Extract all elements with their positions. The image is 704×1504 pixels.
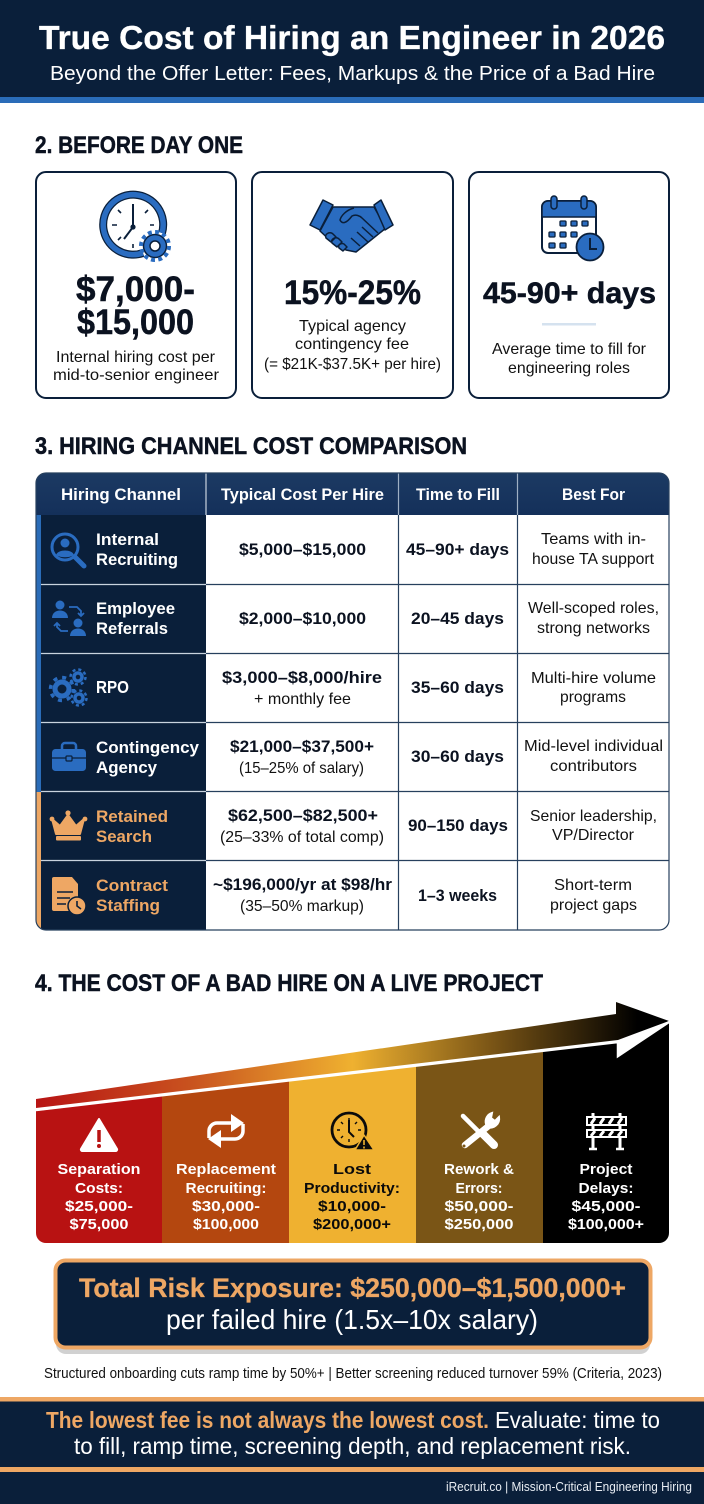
- stat: time to fill: 45-90+ days: [483, 277, 656, 310]
- icon: warning triangle: [81, 1119, 117, 1151]
- icon: referral people: [52, 600, 86, 636]
- icon: gears: [50, 670, 86, 706]
- description: Internal hiring cost per: [56, 349, 216, 366]
- icon: crown: [50, 810, 87, 840]
- row: RPO: RPO: [96, 677, 129, 697]
- description: Average time to fill for: [492, 341, 647, 358]
- icon: road barrier: [587, 1113, 626, 1149]
- step: rework and errors: $250,000: [444, 1216, 514, 1233]
- description: contingency fee: [295, 336, 409, 353]
- row: contract staffing: 1–3 weeks: [418, 887, 497, 905]
- row: employee referrals: Referrals: [96, 620, 168, 638]
- step: project delays: Project: [580, 1161, 632, 1178]
- row: internal recruiting: [52, 531, 655, 569]
- step: lost productivity: Productivity:: [304, 1180, 400, 1197]
- row: employee referrals: 20–45 days: [411, 610, 504, 628]
- step: project delays: $45,000-: [572, 1198, 641, 1215]
- panel: time to fill card: [469, 172, 669, 398]
- row: contract staffing: (35–50% markup): [240, 898, 364, 915]
- row: contingency agency: contributors: [550, 758, 637, 775]
- table header: [61, 486, 626, 504]
- row: contingency agency: (15–25% of salary): [239, 760, 364, 777]
- takeaway: The lowest fee is not always the lowest cost.: [46, 1407, 489, 1433]
- row: internal recruiting: Recruiting: [96, 551, 178, 569]
- step: replacement recruiting: $100,000: [193, 1216, 259, 1233]
- row: internal recruiting: $5,000–$15,000: [239, 541, 366, 559]
- subtitle: Beyond the Offer Letter: Fees, Markups & the Price of a Bad Hire: [50, 63, 655, 85]
- table header: Typical Cost Per Hire: [221, 486, 384, 504]
- row: employee referrals: Employee: [96, 600, 175, 618]
- step: replacement recruiting: [176, 1114, 276, 1233]
- panel: agency fee card: [252, 172, 453, 398]
- step: rework and errors: Rework &: [444, 1161, 514, 1178]
- callout: total risk exposure: per failed hire (1.5x–10x salary): [166, 1304, 538, 1335]
- stat: agency fee: 15%-25%: [284, 274, 421, 312]
- panel: internal hiring cost card: [36, 172, 236, 398]
- row: contingency agency: Mid-level individual: [524, 738, 663, 755]
- icon: clock with warning: [332, 1113, 374, 1150]
- callout: total risk exposure: [56, 1260, 650, 1354]
- row: retained search: [50, 807, 657, 846]
- row: contract staffing: Short-term: [554, 877, 632, 894]
- row: internal recruiting: Internal: [96, 531, 159, 549]
- row: retained search: (25–33% of total comp): [220, 829, 384, 846]
- description: [492, 341, 647, 377]
- row: contingency agency: 30–60 days: [411, 748, 504, 766]
- row: contingency agency: [52, 738, 663, 777]
- takeaway: [46, 1407, 660, 1459]
- row: RPO: Multi-hire volume: [531, 670, 656, 687]
- header banner: [0, 0, 704, 103]
- stat: internal cost: $15,000: [77, 303, 194, 342]
- step: separation costs: $75,000: [70, 1216, 128, 1233]
- row: employee referrals: $2,000–$10,000: [239, 610, 366, 628]
- table header: Best For: [562, 486, 626, 504]
- row: retained search: $62,500–$82,500+: [228, 807, 378, 825]
- table header: Hiring Channel: [61, 486, 181, 504]
- row: retained search: VP/Director: [552, 827, 635, 844]
- stat: internal cost: [76, 270, 195, 342]
- step: rework and errors: Errors:: [456, 1180, 502, 1197]
- source note: Structured onboarding cuts ramp time by 50%+ | Better screening reduced turnover 59% (Criteria, 2023): [44, 1366, 662, 1382]
- step: project delays: $100,000+: [568, 1216, 644, 1233]
- row: contract staffing: [52, 876, 637, 915]
- row: employee referrals: strong networks: [537, 620, 650, 637]
- heading: before day one: 2. BEFORE DAY ONE: [35, 132, 243, 159]
- icon: handshake: [310, 200, 393, 252]
- row: contingency agency: Agency: [96, 759, 158, 777]
- row: retained search: Senior leadership,: [530, 808, 657, 825]
- row: contract staffing: Staffing: [96, 897, 160, 915]
- step: project delays: Delays:: [578, 1180, 634, 1197]
- row: retained search: Search: [96, 828, 152, 846]
- arrow: rising cost: [36, 1002, 669, 1108]
- takeaway: Evaluate: time to: [495, 1407, 660, 1433]
- callout: total risk exposure: Total Risk Exposure: $250,000–$1,500,000+: [79, 1273, 626, 1303]
- step: lost productivity: Lost: [333, 1161, 371, 1178]
- step: separation costs: Costs:: [75, 1180, 123, 1197]
- row: RPO: [50, 669, 656, 708]
- row: RPO: $3,000–$8,000/hire: [222, 669, 382, 687]
- step: lost productivity: [304, 1113, 400, 1233]
- step: replacement recruiting: $30,000-: [192, 1198, 260, 1215]
- row: retained search: Retained: [96, 808, 168, 826]
- step: lost productivity: $200,000+: [313, 1216, 391, 1233]
- step: rework and errors: $50,000-: [444, 1198, 514, 1215]
- title: True Cost of Hiring an Engineer in 2026: [39, 19, 665, 56]
- step: rework and errors: [444, 1113, 514, 1233]
- row: contingency agency: $21,000–$37,500+: [230, 738, 374, 756]
- icon: document with clock: [52, 877, 86, 915]
- row: contract staffing: project gaps: [550, 897, 637, 914]
- row: employee referrals: [52, 600, 659, 638]
- row: contingency agency: Contingency: [96, 739, 200, 757]
- stat: internal cost: $7,000-: [76, 270, 195, 309]
- description: mid-to-senior engineer: [53, 367, 220, 384]
- takeaway: to fill, ramp time, screening depth, and replacement risk.: [74, 1433, 631, 1459]
- step: replacement recruiting: Recruiting:: [186, 1180, 266, 1197]
- step: separation costs: [58, 1119, 140, 1233]
- row: internal recruiting: 45–90+ days: [406, 541, 509, 559]
- description: Typical agency: [299, 318, 406, 335]
- icon: search person: [52, 534, 84, 566]
- row: retained search: 90–150 days: [408, 817, 508, 835]
- footer banner: [0, 1397, 704, 1504]
- table header: Time to Fill: [416, 486, 500, 504]
- description: [264, 318, 441, 373]
- row: RPO: programs: [560, 689, 626, 706]
- row: internal recruiting: house TA support: [532, 551, 655, 568]
- heading: channel comparison: 3. HIRING CHANNEL COST COMPARISON: [35, 433, 467, 460]
- step: project delays: [568, 1113, 644, 1233]
- icon: clock with gear: [103, 195, 169, 260]
- step: replacement recruiting: Replacement: [176, 1161, 276, 1178]
- row: internal recruiting: Teams with in-: [541, 531, 646, 548]
- brand credit: iRecruit.co | Mission-Critical Engineering Hiring: [446, 1480, 692, 1494]
- step: separation costs: $25,000-: [65, 1198, 133, 1215]
- row: employee referrals: Well-scoped roles,: [528, 600, 659, 617]
- row: contract staffing: Contract: [96, 877, 169, 895]
- description: (= $21K-$37.5K+ per hire): [264, 356, 441, 373]
- icon: briefcase: [52, 743, 86, 771]
- comparison table: [36, 473, 669, 930]
- row: RPO: + monthly fee: [254, 691, 351, 708]
- row: contract staffing: ~$196,000/yr at $98/hr: [213, 876, 393, 894]
- heading: cost of a bad hire: 4. THE COST OF A BAD HIRE ON A LIVE PROJECT: [35, 970, 543, 997]
- icon: calendar with clock: [542, 196, 604, 260]
- row: RPO: 35–60 days: [411, 679, 504, 697]
- icon: repeat arrows: [208, 1114, 244, 1148]
- staircase cost chart: [36, 1022, 669, 1243]
- description: [53, 349, 220, 384]
- step: lost productivity: $10,000-: [318, 1198, 386, 1215]
- icon: wrench and screwdriver: [462, 1113, 499, 1148]
- description: engineering roles: [508, 360, 630, 377]
- step: separation costs: Separation: [58, 1161, 140, 1178]
